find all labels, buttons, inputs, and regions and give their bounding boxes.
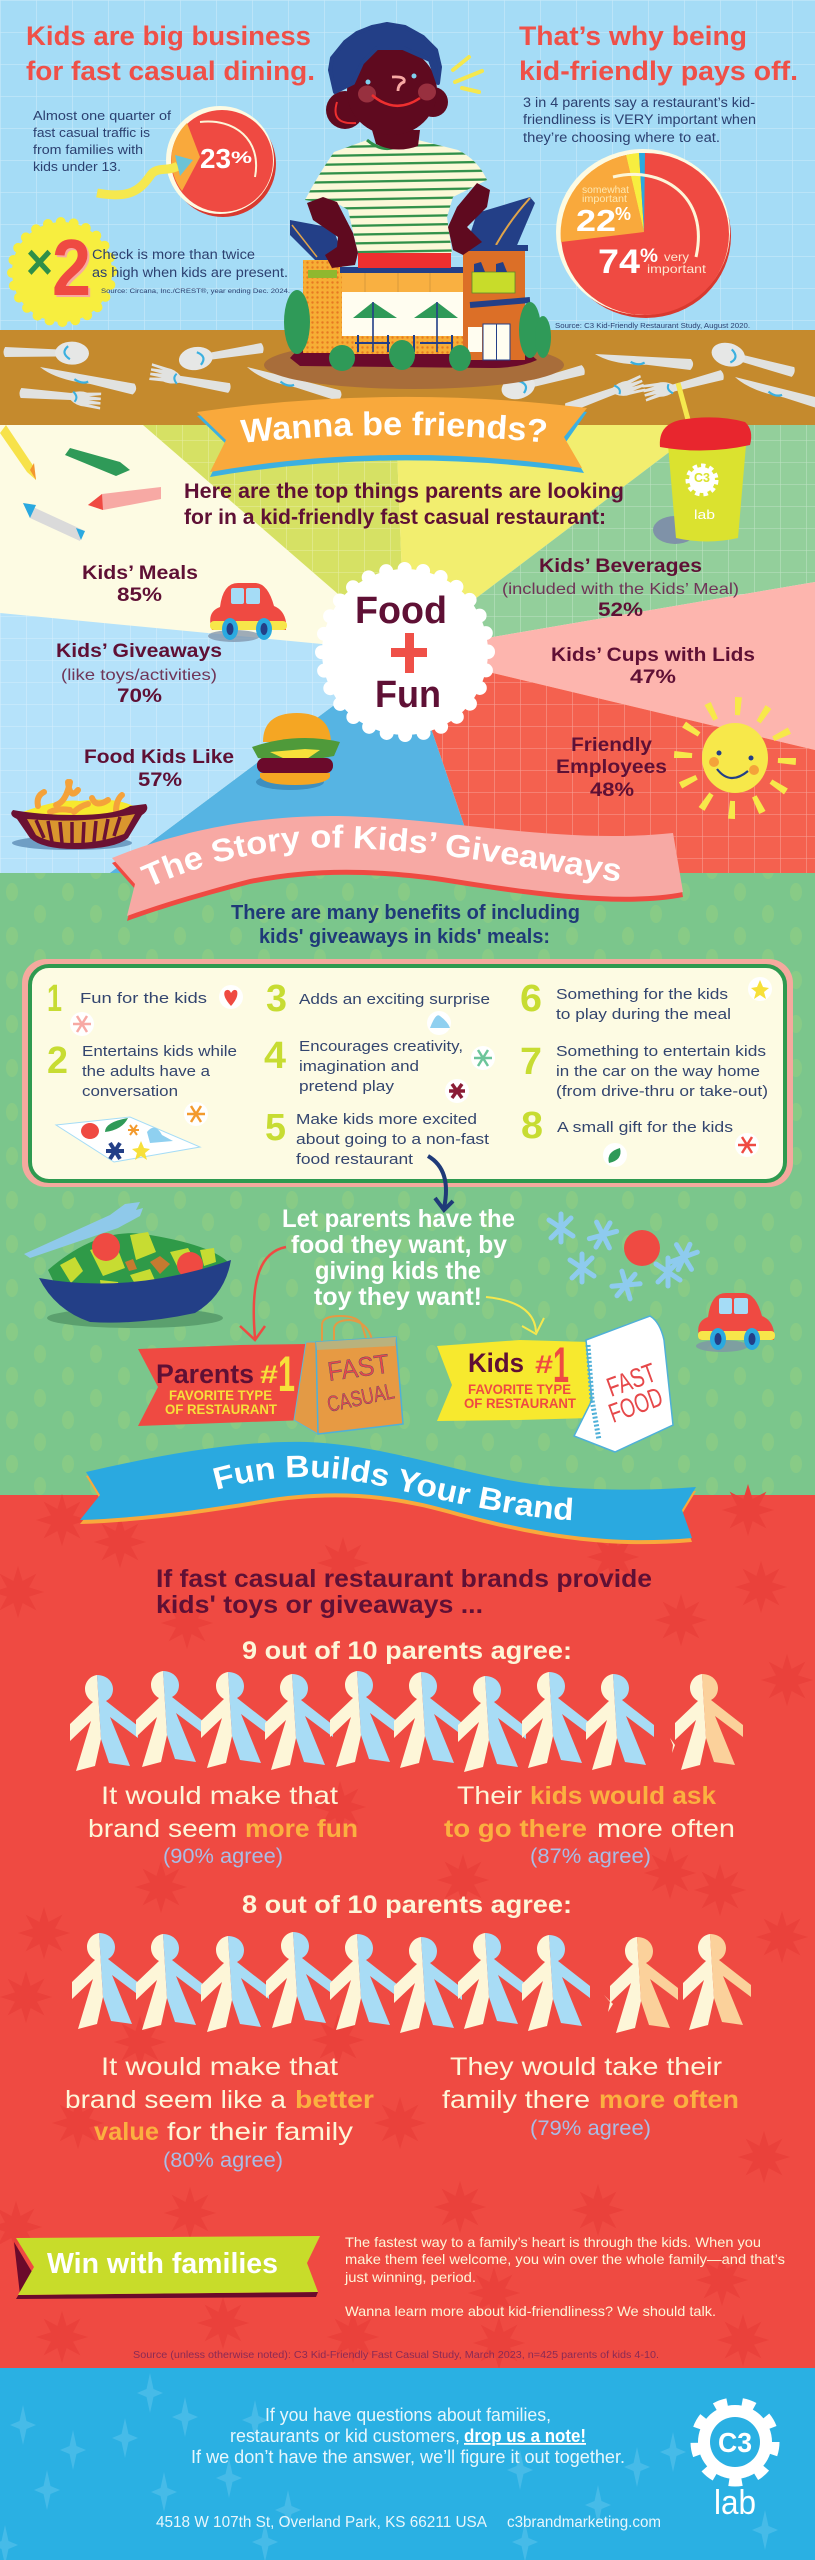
text: 3 in 4 parents [523, 95, 756, 145]
banner: the story of kids giveaways: The Story of Kids’ Giveaways [140, 824, 620, 885]
section background: sky blue header [0, 0, 815, 332]
text: if brands provide toys [156, 1565, 652, 1619]
text: address and website: c3brandmarketing.com [507, 2514, 661, 2531]
pie chart: importance of kid friendliness: somewhat [582, 185, 629, 196]
icon: cloud sticker [427, 1011, 451, 1035]
benefit 4: imagination and [299, 1058, 419, 1075]
icon: burger [252, 713, 340, 790]
label: kids cups with lids [551, 645, 755, 688]
red shorts [358, 250, 451, 268]
text: traffic share: from families with [33, 142, 143, 157]
icon: green asterisk sticker [471, 1046, 495, 1070]
benefit 4: Encourages creativity, [299, 1038, 463, 1055]
banner: parents number one: Parents [156, 1359, 254, 1389]
icon: fast casual bag [294, 1316, 403, 1434]
text: if brands provide toys: kids' toys or giveaways ... [156, 1591, 483, 1619]
banner: win with families [14, 2236, 320, 2299]
finding: more fun: It would make that [101, 1782, 338, 1810]
finding: kids would ask: (87% agree) [530, 1845, 651, 1868]
paper dolls: 8 of 10 [72, 1932, 751, 2033]
banner: kids number one: # [535, 1351, 553, 1379]
section background: sunburst [0, 425, 815, 875]
benefit 2: conversation [82, 1083, 178, 1100]
label: food kids like: 57% [138, 770, 182, 791]
pie chart: 23 percent [166, 106, 276, 217]
label: kids meals [82, 563, 198, 606]
text: intro to top things [184, 480, 624, 529]
text: benefits intro: There are many benefits of including [231, 902, 580, 924]
benefit 7: in the car on the way home [556, 1063, 760, 1080]
benefit 2: 2 [47, 1040, 68, 1082]
benefit 4: pretend play [299, 1078, 395, 1095]
text: address and website: 4518 W 107th St, Overland Park, KS 66211 USA [156, 2514, 488, 2531]
badge: times two: × [26, 234, 53, 290]
banner: kids number one: OF RESTAURANT [464, 1396, 577, 1411]
arrow: navy curve down [428, 1156, 453, 1210]
finding: better value [65, 2053, 374, 2172]
benefit 6: 6 [520, 978, 542, 1020]
icon: fast food bag: FAST [603, 1357, 660, 1403]
finding: more fun: brand seem [88, 1815, 237, 1843]
banner: fun builds your brand: Fun Builds Your Brand [213, 1456, 572, 1520]
center badge: food plus fun [322, 569, 488, 735]
arrow: red to parents banner [240, 1247, 286, 1340]
pie chart: 23 percent: % [231, 148, 252, 167]
text: let parents have the food: food they want, by [291, 1231, 507, 1259]
label: kids cups with lids: 47% [630, 667, 676, 688]
text: 3 in 4 parents: 3 in 4 parents say a restaurant’s kid- [523, 95, 755, 110]
finding: kids would ask: Their [457, 1782, 522, 1810]
heading: why kid-friendly pays off: That’s why being [519, 21, 747, 51]
icon: fast casual bag: CASUAL [325, 1378, 397, 1417]
excitement marks [453, 57, 482, 92]
text: check is twice as high: as high when kids are present. [92, 265, 288, 280]
pie chart: importance of kid friendliness [556, 149, 731, 318]
neck and head [326, 24, 448, 150]
scattered cutlery on table [3, 336, 815, 419]
heading: why kid-friendly pays off [519, 21, 798, 86]
benefit 4 [264, 1035, 463, 1095]
benefit 2: Entertains kids while [82, 1043, 237, 1060]
label: kids beverages: (included with the Kids’ Meal) [502, 581, 739, 598]
label: kids giveaways [56, 641, 222, 707]
finding: kids would ask: to go there [444, 1815, 587, 1843]
heading: why kid-friendly pays off: kid-friendly pays off. [519, 56, 798, 86]
text: closing paragraph: make them feel welcome, you win over the whole family—and that’s [345, 2251, 785, 2267]
icon: kids cup with straw: C3 [694, 470, 710, 485]
benefit 1: 1 [47, 978, 62, 1020]
text: closing paragraph [344, 2234, 785, 2319]
label: kids giveaways: Kids’ Giveaways [56, 641, 222, 662]
benefit 8: A small gift for the kids [557, 1119, 733, 1136]
icon: orange asterisk sticker [184, 1102, 208, 1126]
finding: kids would ask: more often [597, 1815, 735, 1843]
finding: better value: better [295, 2086, 374, 2114]
banner: parents number one [138, 1344, 307, 1426]
text: if brands provide toys: If fast casual restaurant brands provide [156, 1565, 652, 1593]
banner: fun builds your brand [80, 1442, 696, 1544]
striped shirt [305, 138, 487, 253]
finding: take family more often [442, 2053, 739, 2140]
arms [307, 183, 490, 268]
finding: more fun: (90% agree) [163, 1845, 283, 1868]
badge: times two: 2 [52, 223, 91, 312]
icon: fast food bag: FOOD [605, 1382, 667, 1429]
pie chart: importance of kid friendliness: % [640, 246, 658, 267]
benefit 7 [520, 1041, 768, 1100]
text: traffic share [33, 108, 171, 174]
icon: crayons [0, 425, 161, 541]
benefit 2: the adults have a [82, 1063, 211, 1080]
banner: win with families: Win with families [47, 2248, 278, 2280]
arrow: yellow ribbon to pie [97, 155, 193, 195]
benefit 5: Make kids more excited [296, 1111, 477, 1128]
finding: more fun [88, 1782, 358, 1868]
text: let parents have the food: Let parents have the [282, 1205, 515, 1233]
section background: brown table band [0, 330, 815, 426]
illustration: salad bowl with fork [24, 1202, 231, 1328]
benefit 7: 7 [520, 1041, 542, 1083]
finding: better value: It would make that [101, 2053, 338, 2081]
benefit 5 [265, 1107, 490, 1168]
finding: more fun: more fun [245, 1815, 358, 1843]
paper dolls: 9 of 10 [70, 1671, 743, 1772]
label: kids giveaways: 70% [117, 686, 162, 707]
banner: kids number one [437, 1337, 590, 1421]
icon: basket of macaroni [11, 782, 147, 850]
finding: take family more often: more often [599, 2086, 739, 2114]
text: traffic share: kids under 13. [33, 159, 121, 174]
banner: parents number one: OF RESTAURANT [165, 1402, 278, 1417]
icon: smiling sun [683, 706, 787, 810]
icon: star sticker [748, 977, 772, 1001]
finding: kids would ask [444, 1782, 735, 1868]
pie chart: 23 percent: 23 [200, 143, 231, 174]
heading: kids are big business: for fast casual dining. [26, 56, 315, 86]
pie chart: importance of kid friendliness: 22 [576, 203, 616, 238]
text: let parents have the food [282, 1205, 515, 1311]
text: contact invitation: If we don’t have the answer, we’ll figure it out together. [191, 2447, 625, 2467]
text: check is twice as high: Check is more than twice [92, 247, 255, 262]
finding: take family more often: family there [442, 2086, 590, 2114]
banner: parents number one: # [260, 1361, 278, 1389]
banner: the story of kids giveaways [112, 816, 683, 921]
text: intro to top things: Here are the top things parents are looking [184, 480, 624, 503]
text: 3 in 4 parents: they’re choosing where to eat. [523, 130, 720, 145]
benefit 8: 8 [521, 1105, 543, 1147]
text: traffic share: fast casual traffic is [33, 125, 151, 140]
benefit 7: Something to entertain kids [556, 1043, 766, 1060]
text: closing paragraph: Wanna learn more about kid-friendliness? We should talk. [345, 2303, 716, 2319]
logo: C3 lab gear: lab [714, 2484, 756, 2522]
text: benefits intro [231, 902, 580, 948]
source note left: Source: Circana, Inc./CREST®, year ending Dec. 2024. [101, 287, 290, 295]
pie chart: importance of kid friendliness: 74 [598, 243, 640, 281]
banner: kids number one: FAVORITE TYPE [468, 1382, 571, 1397]
label: friendly employees: Friendly [571, 735, 652, 756]
illustration: child sitting on restaurant [264, 24, 564, 389]
benefit 1 [47, 978, 207, 1020]
benefit 6: Something for the kids [556, 986, 728, 1003]
logo: C3 lab gear [695, 2402, 775, 2522]
label: food kids like [84, 747, 234, 791]
label: kids beverages: Kids’ Beverages [539, 556, 702, 577]
pie chart: importance of kid friendliness: very [664, 250, 689, 264]
icon: fast casual bag: FAST [326, 1349, 391, 1387]
finding: better value: value [94, 2118, 159, 2146]
benefit 7: (from drive-thru or take-out) [556, 1083, 768, 1100]
benefit 2 [47, 1040, 237, 1100]
benefit 5: 5 [265, 1107, 286, 1149]
center badge: food plus fun: Fun [375, 674, 441, 716]
label: kids cups with lids: Kids’ Cups with Lids [551, 645, 755, 666]
benefit 4: 4 [264, 1035, 286, 1077]
text: let parents have the food: toy they want! [314, 1283, 482, 1311]
benefit 6: to play during the meal [556, 1006, 731, 1023]
banner: parents number one: FAVORITE TYPE [169, 1388, 272, 1403]
benefit 1: Fun for the kids [80, 990, 207, 1007]
benefit 3: Adds an exciting surprise [299, 991, 490, 1008]
finding: better value: for their family [167, 2118, 354, 2146]
banner: kids number one: Kids [468, 1348, 524, 1378]
label: kids giveaways: (like toys/activities) [61, 667, 217, 684]
label: kids meals: Kids’ Meals [82, 563, 198, 584]
badge: times two [12, 222, 112, 322]
text: benefits intro: kids' giveaways in kids' meals: [259, 926, 550, 948]
benefit 5: food restaurant [296, 1151, 414, 1168]
text: closing paragraph: The fastest way to a family’s heart is through the kids. When you [345, 2234, 761, 2250]
badge: times two: 2 [54, 225, 93, 314]
label: kids beverages: 52% [598, 600, 643, 621]
benefit 5: about going to a non-fast [296, 1131, 490, 1148]
icon: toy car [208, 583, 287, 642]
finding: better value: (80% agree) [163, 2149, 283, 2172]
ground shadow [264, 341, 564, 389]
text: traffic share: Almost one quarter of [33, 108, 171, 123]
banner: parents number one: 1 [278, 1346, 295, 1402]
source note bottom: Source (unless otherwise noted): C3 Kid-Friendly Fast Casual Study, March 2023, n=425 parents of kids 4-10. [133, 2350, 659, 2361]
icon: sticker sheet [56, 1117, 200, 1162]
arrow: yellow to kids banner [486, 1297, 544, 1334]
center badge: food plus fun: Food [355, 590, 447, 632]
label: friendly employees: 48% [590, 780, 634, 801]
heading: kids are big business: Kids are big business [26, 21, 311, 51]
section background: red with bursts [0, 1484, 815, 2370]
text: 3 in 4 parents: friendliness is VERY important when [523, 112, 756, 127]
benefit 3: 3 [266, 978, 287, 1020]
finding: better value: brand seem like a [65, 2086, 286, 2114]
text: contact invitation [191, 2405, 625, 2467]
source note right: Source: C3 Kid-Friendly Restaurant Study, August 2020. [555, 323, 750, 330]
label: friendly employees [556, 735, 667, 801]
illustration: second toy car [696, 1293, 775, 1352]
banner: wanna be friends: Wanna be friends? [240, 411, 546, 442]
pie chart: importance of kid friendliness: % [615, 204, 631, 224]
pie chart: importance of kid friendliness: important [647, 262, 707, 276]
benefit 3 [266, 978, 490, 1020]
icon: red asterisk sticker [735, 1133, 759, 1157]
icon: fast food bag [574, 1316, 673, 1452]
heading: kids are big business [26, 21, 315, 86]
section background: blue footer [0, 2368, 815, 2560]
text: let parents have the food: giving kids the [315, 1257, 481, 1285]
finding: kids would ask: kids would ask [530, 1782, 716, 1810]
text: address and website [156, 2514, 661, 2531]
icon: leaf sticker [603, 1143, 627, 1167]
text: contact invitation: restaurants or kid customers, [230, 2426, 460, 2446]
label: friendly employees: Employees [556, 757, 667, 778]
text: check is twice as high [92, 247, 288, 280]
logo: C3 lab gear: C3 [718, 2427, 752, 2458]
panel: benefits list [22, 959, 793, 1187]
section background: green dotted [0, 873, 815, 1498]
icon: heart sticker [219, 985, 243, 1009]
icon: pink asterisk sticker [70, 1012, 94, 1036]
icon: kids cup with straw [653, 383, 751, 544]
banner: wanna be friends [197, 396, 587, 477]
heading: 9 out of 10: 9 out of 10 parents agree: [242, 1637, 572, 1665]
icon: kids cup with straw: lab [694, 507, 715, 522]
restaurant building [284, 197, 551, 371]
text: closing paragraph: just winning, period. [344, 2269, 476, 2285]
finding: take family more often: They would take their [450, 2053, 722, 2081]
icon: maroon flower sticker [445, 1079, 469, 1103]
banner: kids number one: 1 [553, 1337, 569, 1393]
benefit 6 [520, 978, 731, 1023]
text: contact invitation: If you have questions about families, [265, 2405, 551, 2425]
benefit 8 [521, 1105, 733, 1147]
label: kids beverages [502, 556, 739, 621]
illustration: jacks and ball [549, 1214, 701, 1303]
label: kids meals: 85% [117, 585, 162, 606]
text: intro to top things: for in a kid-friendly fast casual restaurant: [184, 506, 606, 529]
pie chart: importance of kid friendliness: important [582, 194, 627, 205]
finding: take family more often: (79% agree) [530, 2117, 651, 2140]
text: contact invitation: drop us a note! [464, 2426, 586, 2446]
heading: 8 out of 10: 8 out of 10 parents agree: [242, 1891, 572, 1919]
label: food kids like: Food Kids Like [84, 747, 234, 768]
